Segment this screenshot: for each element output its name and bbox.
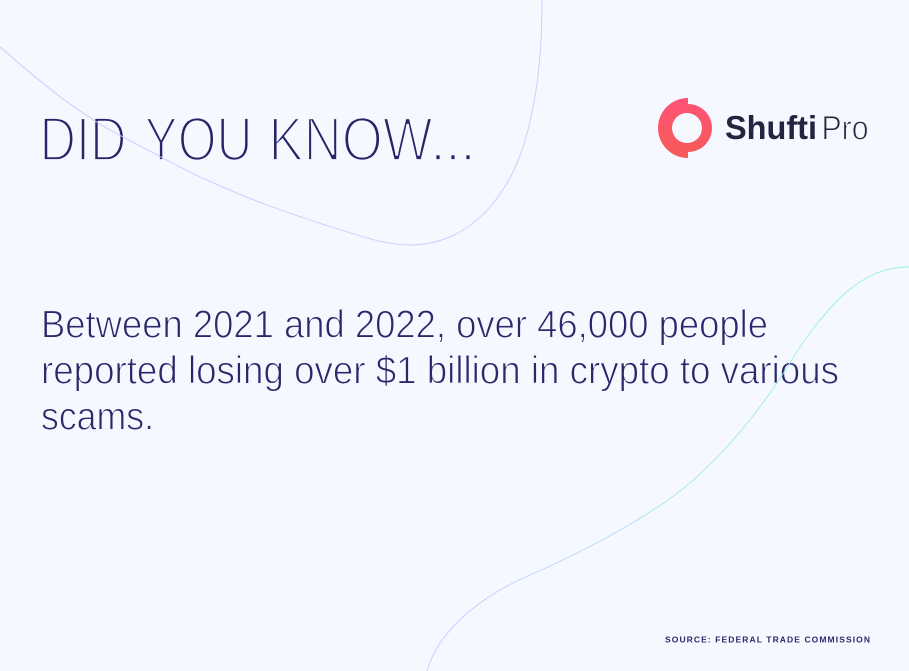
text block: statistic [41,303,839,438]
title: KNOW [268,105,433,174]
title: YOU [144,105,252,174]
text block: statistic: Between 2021 and 2022, over 46,000 people [41,303,768,346]
text block: statistic: scams. [41,395,154,438]
logo wordmark: Pro: Pro [822,109,868,147]
icon: logo ring [658,98,712,158]
source note: SOURCE: FEDERAL TRADE COMMISSION [665,634,870,644]
text block: statistic: reported losing over $1 billion in crypto to various [41,349,839,392]
title: ... [429,105,477,174]
title: DID [40,105,126,174]
logo wordmark: Shufti: Shufti [725,109,817,146]
logo: Shufti Pro [658,98,817,158]
decorative curve: teal [427,267,909,671]
title [40,105,477,174]
decorative curve: purple [0,0,542,245]
